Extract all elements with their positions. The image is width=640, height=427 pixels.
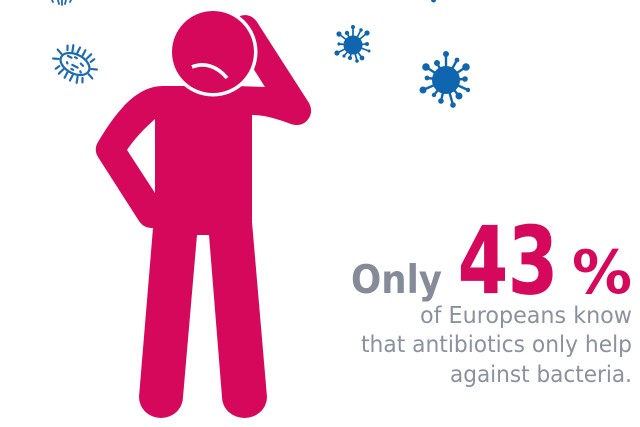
text: description: of Europeans know [420,303,632,329]
stat: percent sign: % [572,238,632,308]
head [172,11,254,93]
icon: small virus [334,25,370,63]
icon: worried person [96,8,311,418]
icon: partial virus at top edge [431,0,436,2]
stat: 43: 43 [458,207,558,315]
person body [96,15,311,418]
label: Only: Only [351,258,442,303]
text: description: against bacteria. [450,362,632,388]
neck gap [236,68,265,87]
text: description: that antibiotics only help [361,332,632,358]
icon: bacterium [48,39,102,89]
head ring [168,8,258,96]
frown [192,65,227,78]
text: description [361,303,632,388]
arm pit cutout [127,119,155,193]
icon: large virus [420,51,470,108]
icon: partial bacterium at top edge [52,0,71,5]
